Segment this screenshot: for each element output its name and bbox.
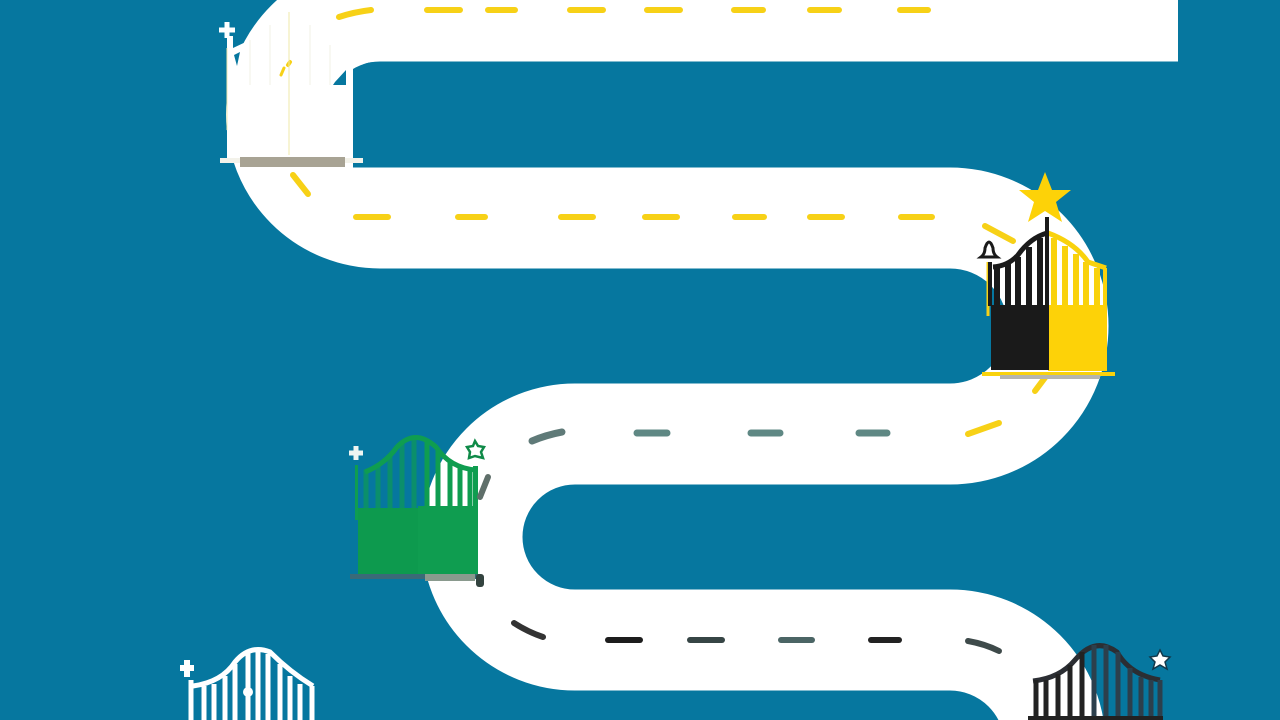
gate: green [349, 437, 488, 587]
gate: black and yellow with star [981, 172, 1115, 379]
road dashes: yellow section [293, 10, 1047, 434]
gate: white top-left [219, 10, 363, 167]
road dashes: dark section [514, 623, 999, 651]
top-left inner road corner [353, 62, 600, 168]
gate: dark bottom-right [1028, 645, 1170, 720]
gate: white bottom-left [180, 650, 313, 720]
road dashes: grey section [532, 432, 887, 441]
winding white road [277, 11, 1178, 720]
